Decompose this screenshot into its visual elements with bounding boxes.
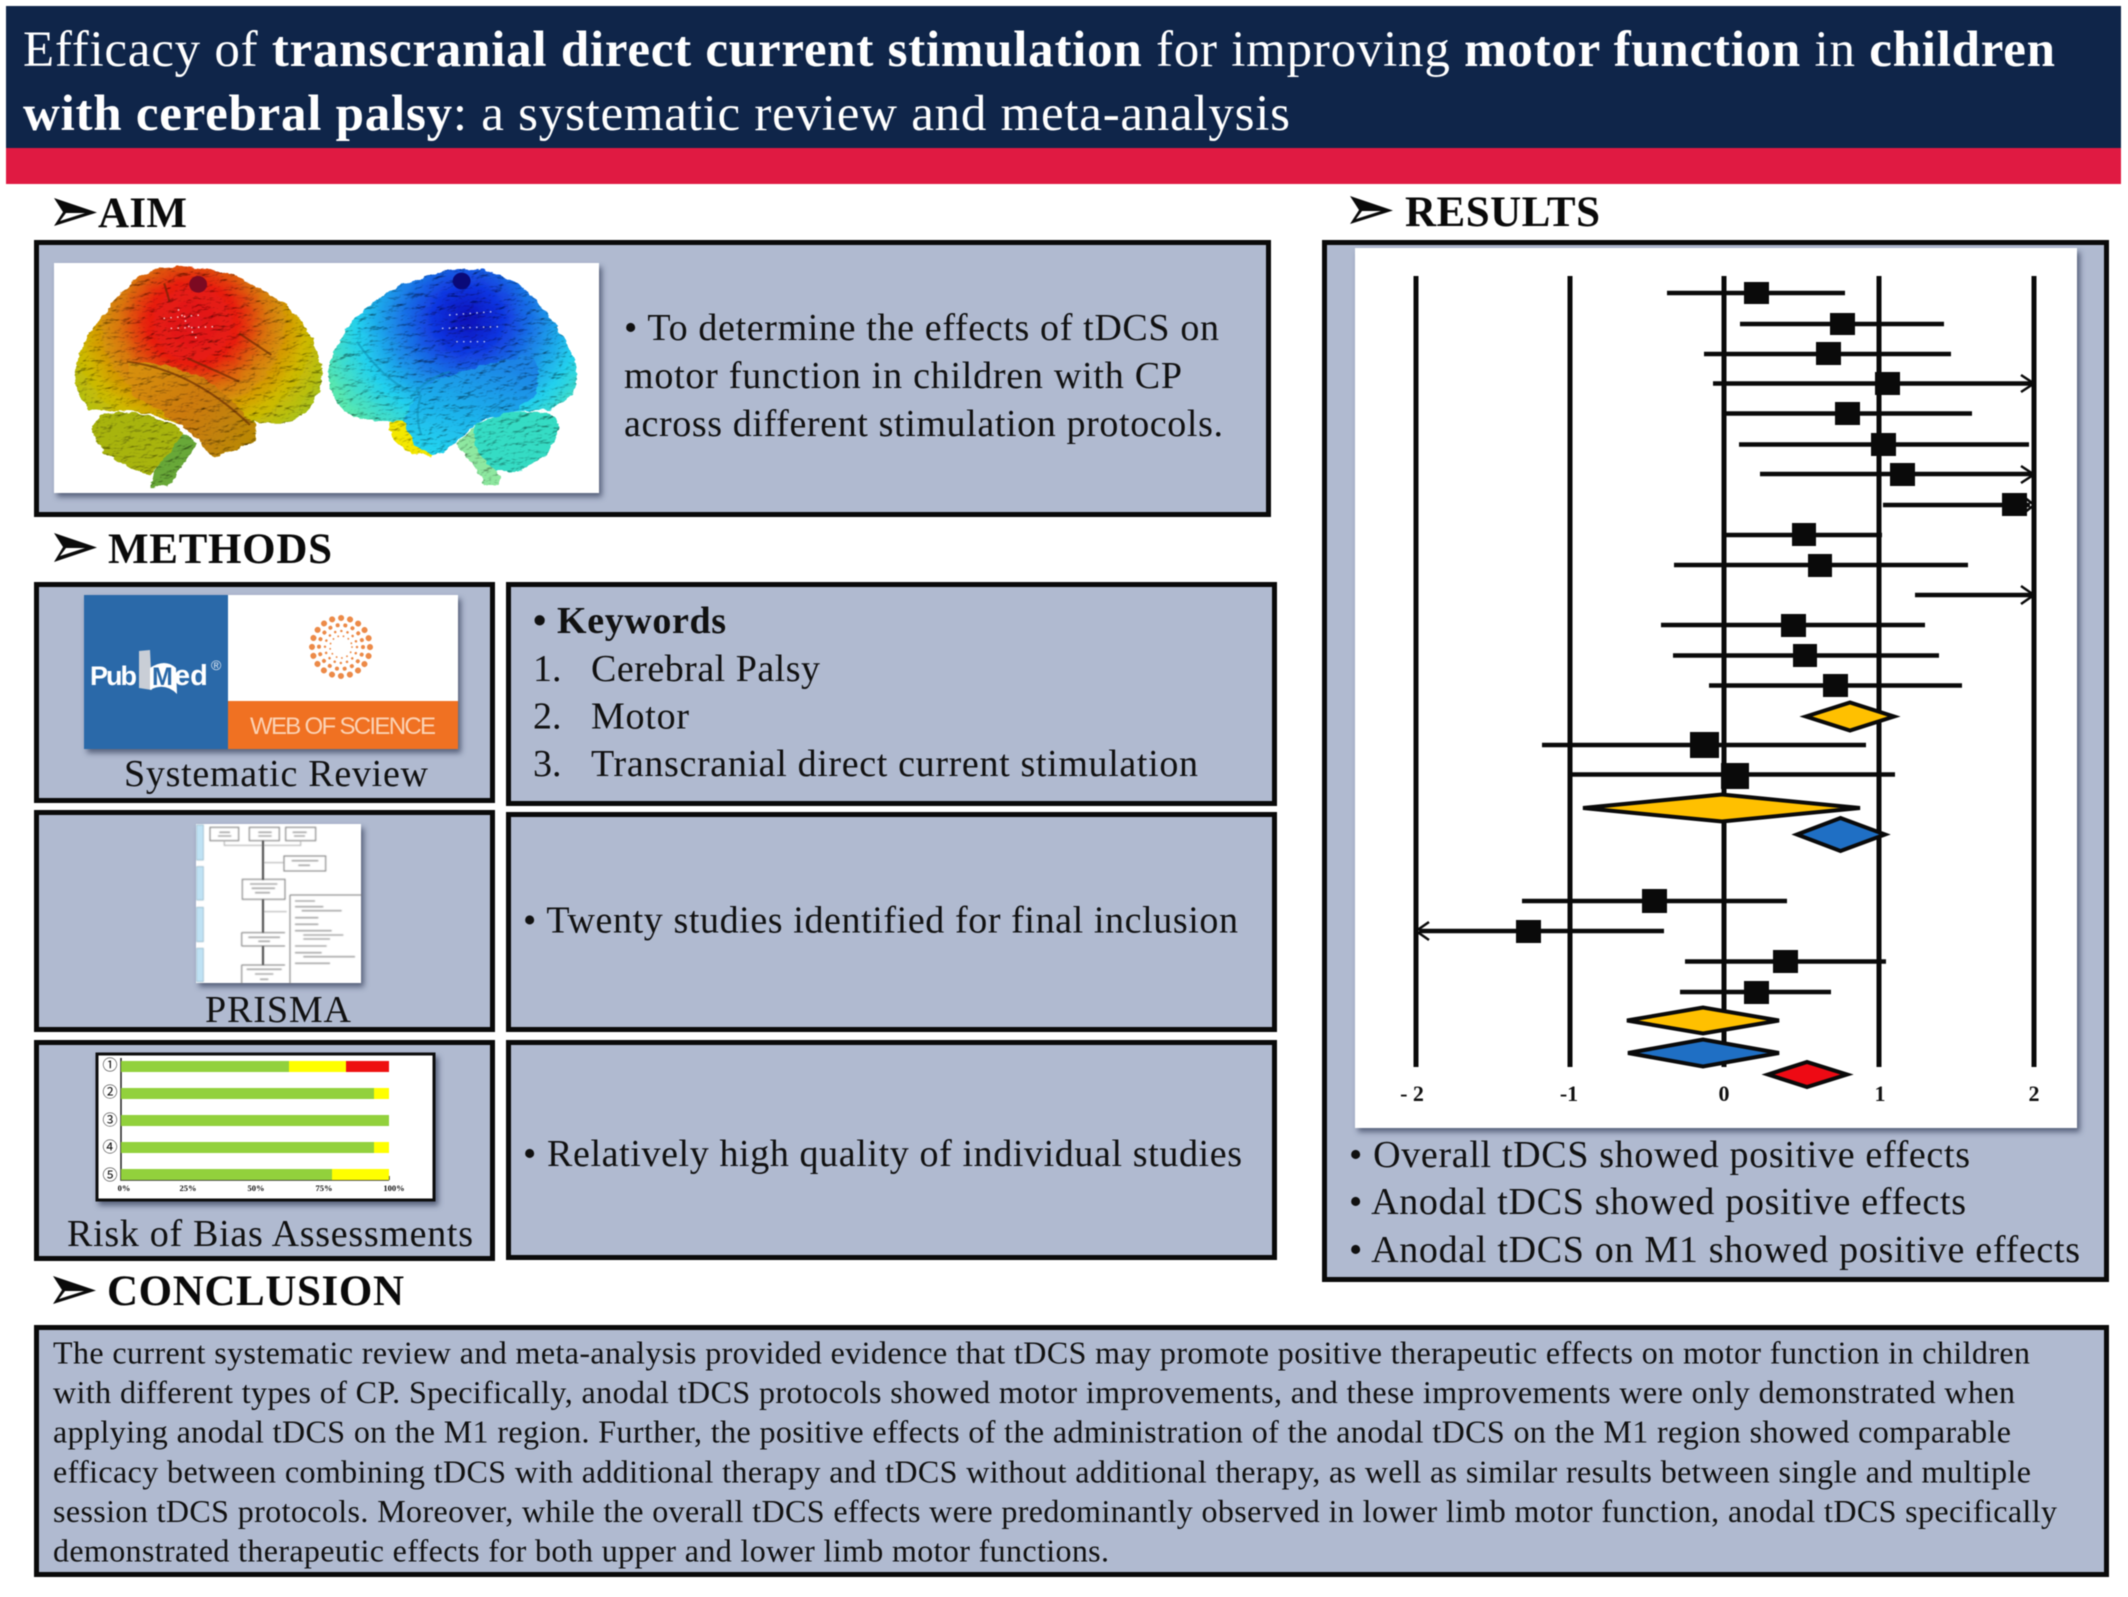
panel: study quality <box>508 1042 1274 1258</box>
chart: risk of bias bars: ④ <box>102 1136 118 1157</box>
panel: risk of bias <box>36 1042 492 1258</box>
logo: PubMed: ed <box>174 660 208 692</box>
text: conclusion paragraph: with different types of CP. Specifically, anodal tDCS protocols showed motor improvements, and these improvements were only demonstrated when <box>53 1374 2015 1410</box>
logo: PubMed <box>84 595 228 749</box>
title: with cerebral palsy: a systematic review and meta-analysis <box>23 86 1290 142</box>
icon: anodal brain (warm) <box>74 267 323 487</box>
text: conclusion paragraph <box>53 1334 2057 1568</box>
text: results bullets <box>1349 1134 2080 1271</box>
panel: results <box>1324 242 2106 1280</box>
text: aim statement <box>624 307 1223 445</box>
text: conclusion paragraph: applying anodal tDCS on the M1 region. Further, the positive effects of the administration of the anodal tDCS on the M1 region showed comparable <box>53 1414 2011 1450</box>
icon: cathodal brain (cool) <box>328 268 578 485</box>
text: results bullets: • Overall tDCS showed positive effects <box>1349 1134 1970 1176</box>
panel: study quality: • Relatively high quality of individual studies <box>523 1133 1242 1175</box>
text: aim statement: • To determine the effects of tDCS on <box>624 307 1219 349</box>
logo: PubMed: ® <box>211 657 222 673</box>
panel: included studies: • Twenty studies identified for final inclusion <box>523 900 1238 942</box>
chart: risk of bias bars: ② <box>102 1081 118 1102</box>
text: results bullets: • Anodal tDCS showed positive effects <box>1349 1181 1966 1223</box>
text: aim statement: across different stimulation protocols. <box>624 403 1223 445</box>
text: aim statement: motor function in children with CP <box>624 355 1182 397</box>
chart: forest plot: 1 <box>1874 1081 1886 1106</box>
logo: Web of Science <box>228 618 458 749</box>
text: keywords list: Cerebral Palsy <box>591 648 820 690</box>
logo: PubMed: M <box>152 663 173 691</box>
chart: forest plot: 0 <box>1718 1081 1730 1106</box>
heading: AIM: AIM <box>98 190 187 237</box>
label: Risk of Bias Assessments <box>67 1213 473 1255</box>
heading: METHODS: METHODS <box>108 526 332 573</box>
text: conclusion paragraph: demonstrated therapeutic effects for both upper and lower limb motor functions. <box>53 1532 1109 1568</box>
label: Systematic Review <box>124 753 429 795</box>
chart: forest plot: 2 <box>2028 1081 2040 1106</box>
panel: PRISMA <box>36 812 492 1031</box>
header banner <box>6 6 2121 184</box>
chart: risk of bias bars: ③ <box>102 1109 118 1130</box>
chart: risk of bias bars <box>97 1054 434 1200</box>
text: keywords list: Motor <box>591 696 689 738</box>
panel: included studies <box>508 814 1274 1030</box>
chart: forest plot <box>1355 248 2077 1128</box>
text: keywords list: • Keywords <box>533 600 726 642</box>
text: keywords list: 2. <box>533 696 562 738</box>
chart: risk of bias bars: 0% <box>118 1183 130 1193</box>
text: conclusion paragraph: The current systematic review and meta-analysis provided evidence that tDCS may promote positive therapeutic effects on motor function in children <box>53 1334 2030 1370</box>
heading: CONCLUSION: CONCLUSION <box>107 1268 404 1315</box>
image: database logos <box>84 595 458 749</box>
chart: risk of bias bars: 25% <box>180 1183 196 1193</box>
heading: AIM <box>54 190 187 237</box>
text: keywords list <box>533 600 1198 785</box>
chart: forest plot: - 2 <box>1400 1081 1424 1106</box>
label: PRISMA <box>205 989 352 1031</box>
heading: RESULTS: RESULTS <box>1405 189 1600 236</box>
logo: PubMed: Pub <box>90 661 137 691</box>
text: results bullets: • Anodal tDCS on M1 showed positive effects <box>1349 1229 2080 1271</box>
chart: risk of bias bars: 50% <box>248 1183 264 1193</box>
panel: systematic review <box>36 584 492 800</box>
text: conclusion paragraph: efficacy between combining tDCS with additional therapy and tDCS without additional therapy, as well as similar results between single and multiple <box>53 1454 2031 1490</box>
text: keywords list: Transcranial direct current stimulation <box>591 743 1198 785</box>
text: keywords list: 1. <box>533 648 562 690</box>
image: brain stimulation maps <box>54 263 599 493</box>
panel: conclusion <box>36 1328 2106 1574</box>
text: conclusion paragraph: session tDCS protocols. Moreover, while the overall tDCS effects were predominantly observed in lower limb motor function, anodal tDCS specifically <box>53 1493 2057 1529</box>
panel: keywords <box>508 584 1274 804</box>
logo: Web of Science: WEB OF SCIENCE <box>250 713 436 740</box>
title <box>23 22 2055 142</box>
chart: forest plot: -1 <box>1560 1081 1578 1106</box>
panel: aim <box>36 242 1268 514</box>
chart: risk of bias bars: ① <box>102 1054 118 1075</box>
chart: risk of bias bars: ⑤ <box>102 1164 118 1185</box>
chart: risk of bias bars: 100% <box>383 1183 405 1193</box>
image: PRISMA flow diagram <box>196 824 362 983</box>
title: Efficacy of transcranial direct current stimulation for improving motor function in children <box>23 22 2055 78</box>
text: keywords list: 3. <box>533 743 562 785</box>
chart: risk of bias bars: 75% <box>316 1183 332 1193</box>
